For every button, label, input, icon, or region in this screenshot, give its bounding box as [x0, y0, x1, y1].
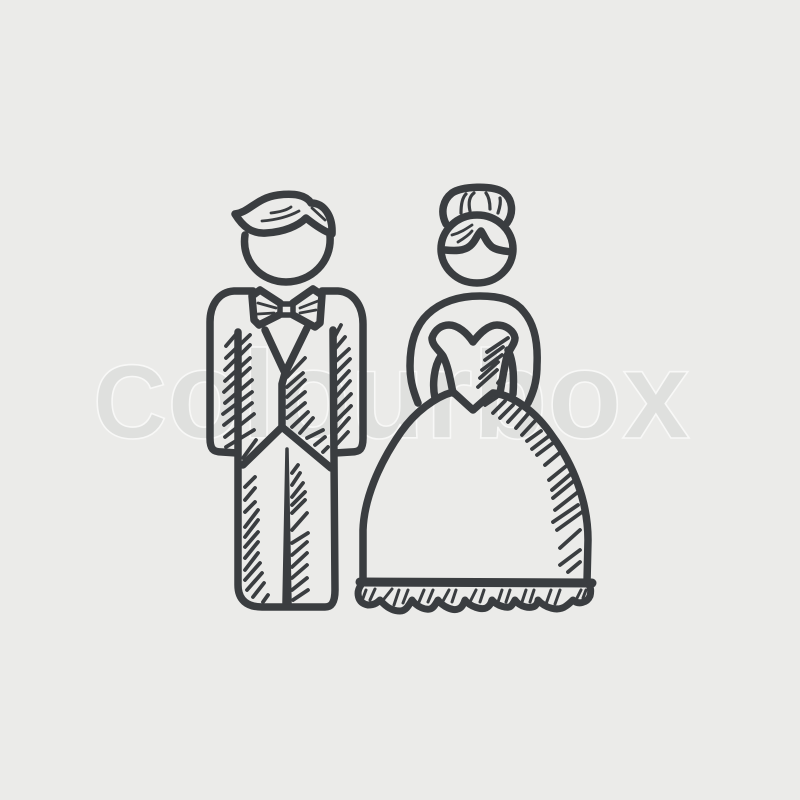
icon: skirt hem and ruffle — [358, 582, 592, 611]
icon: groom hair — [235, 194, 332, 234]
icon: bride hair bun — [443, 187, 512, 224]
icon: bride head — [441, 215, 513, 283]
icon: bride skirt — [363, 392, 588, 582]
icon: bow tie — [252, 289, 322, 327]
icon: groom jacket and trousers — [210, 291, 363, 607]
icon: bride fringe — [445, 225, 512, 252]
icon: groom shading hatches — [223, 325, 351, 602]
icon: groom head — [245, 235, 330, 282]
icon: bride bodice and arms — [432, 325, 515, 398]
icon: bride shoulders — [410, 296, 537, 403]
icon: bride shading hatches — [478, 338, 582, 572]
watermark: Colourbox: Colourbox — [93, 326, 690, 465]
groom figure — [210, 194, 363, 607]
bride figure — [358, 187, 592, 611]
